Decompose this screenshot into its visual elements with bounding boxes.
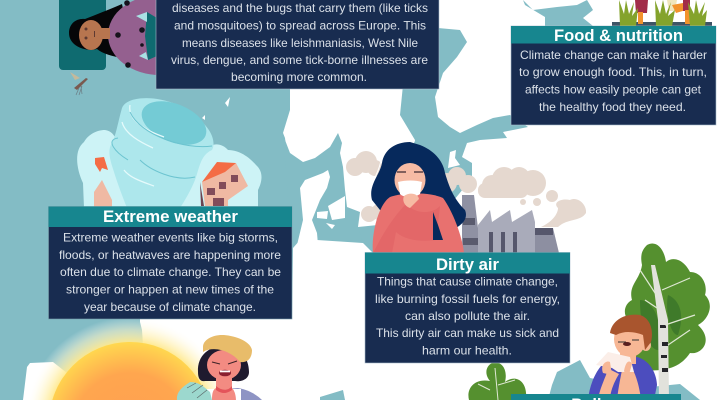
pyjama stars [115,0,145,68]
mask [398,180,422,197]
panel text: year because of climate change. [84,300,256,314]
swirl lines [122,105,164,186]
panel text: Extreme weather events like big storms, [63,230,278,244]
icon: sun [24,317,236,400]
panel text: diseases and the bugs that carry them (like ticks [172,1,428,15]
pillow [59,0,106,70]
panel text: becoming more common. [231,70,367,84]
panel: food and nutrition: Food & nutrition [554,27,683,45]
panel text: like burning fossil fuels for energy, [375,292,560,306]
hair [371,142,466,232]
panel: food and nutrition [511,26,716,125]
face [207,350,241,380]
panel: extreme weather [48,206,292,319]
panel text [375,274,560,358]
panel text [519,48,707,114]
panel text: affects how easily people can get [525,82,702,96]
flying debris [95,157,108,172]
panel text: and mosquitoes) to spread across Europe. This [174,18,426,32]
body [108,0,212,75]
face [394,163,426,197]
icon: small tree [468,362,526,400]
hair [198,346,249,381]
panel text: floods, or heatwaves are happening more [59,248,281,262]
icon: factory [462,195,559,253]
panel: extreme weather: Extreme weather [103,208,239,226]
map: North Sea, Baltic and other seas [283,0,700,400]
panel text: means diseases like leishmaniasis, West Nile [182,36,418,50]
panel text: can also pollute the air. [405,309,530,323]
blanket [145,12,157,60]
panel text: This dirty air can make us sick and [376,326,559,340]
face [79,20,110,50]
panel: dirty air: Dirty air [436,256,500,274]
map: Denmark and islands [297,150,460,245]
icon: tornado with houses [77,93,262,208]
panel text: harm our health. [422,344,512,358]
heading [511,26,716,44]
icon: food crops [612,0,712,27]
tornado funnel [109,98,214,208]
panel text: often due to climate change. They can be [60,265,281,279]
panel text: Climate change can make it harder [520,48,707,62]
funnel opening [135,93,213,153]
heading [365,252,570,274]
heading [48,206,292,227]
panel: infectious diseases [156,0,439,89]
cap [203,335,252,362]
panel text [59,230,281,314]
panel text: stronger or happen at new times of the [66,282,274,296]
tornado cloud [77,130,262,208]
panel text: Things that cause climate change, [377,274,558,288]
icon: woman in heat with fan [177,335,262,400]
panel: pollen [511,394,681,400]
sweater [373,193,464,253]
fan [177,382,212,400]
shirt [205,388,262,400]
neck and chest [212,378,236,400]
icon: sick woman in bed [59,0,212,75]
icon: woman with mask coughing [370,141,466,253]
panel: dirty air [365,252,570,363]
panel text: to grow enough food. This, in turn, [519,65,707,79]
hand [403,194,419,208]
panel text [171,1,428,84]
hair [69,4,130,58]
icon: birch tree [625,244,710,400]
panel text: the healthy food they need. [539,100,686,114]
panel text: virus, dengue, and some tick-borne illnesses are [171,53,428,67]
icon: boy sneezing into tissue [588,315,657,400]
icon: mosquito [70,72,88,95]
icon: dirty air smoke [346,151,586,227]
house [202,163,248,206]
